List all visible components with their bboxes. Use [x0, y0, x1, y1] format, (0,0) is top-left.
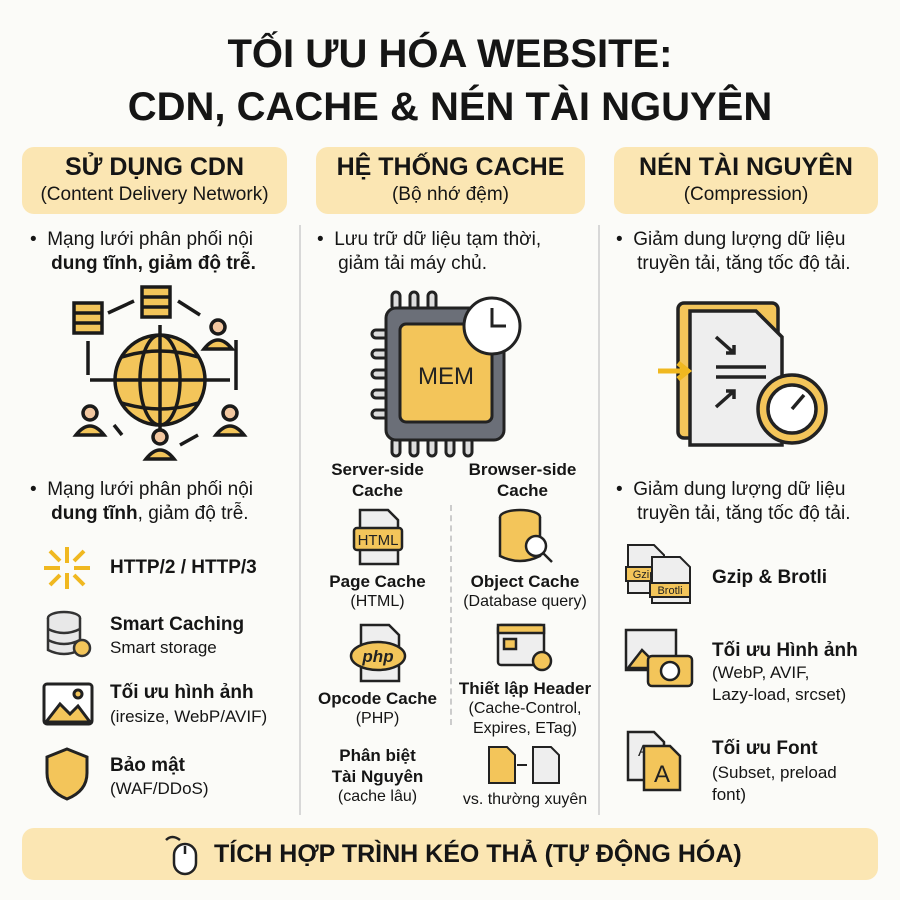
item: font: (Subset, preload — [712, 763, 837, 782]
item: distinguish: Tài Nguyên — [332, 767, 423, 786]
item: font — [626, 730, 837, 804]
panel: cache: Expires, ETag) — [473, 720, 577, 737]
bullet 2: • Giảm dung lượng dữ liệu — [616, 479, 845, 500]
header: cache — [316, 147, 585, 214]
icon: memory chip with clock: MEM — [418, 363, 474, 390]
item: gzip: Gzip — [633, 569, 655, 581]
item: HTTP: HTTP/2 / HTTP/3 — [110, 557, 257, 578]
item: Object Cache: Object Cache — [471, 572, 579, 591]
item: images: Tối ưu hình ảnh — [110, 682, 254, 703]
bullet 1: truyền tải, tăng tốc độ tải. — [637, 253, 850, 274]
item: header — [459, 624, 591, 737]
item: security: Bảo mật — [110, 755, 185, 776]
item: Opcode: (PHP) — [356, 710, 399, 727]
item: Object Cache — [463, 508, 587, 610]
item: gzip: Gzip & Brotli — [712, 567, 827, 588]
item: images — [42, 682, 267, 726]
bullet 2: • Mạng lưới phân phối nội — [30, 479, 253, 500]
header: compression: NÉN TÀI NGUYÊN — [639, 153, 853, 181]
header: cache: (Bộ nhớ đệm) — [392, 184, 509, 205]
panel: CDN — [30, 229, 267, 801]
item: security — [46, 747, 209, 801]
item: Object Cache: (Database query) — [463, 593, 587, 610]
item: header: Thiết lập Header — [459, 679, 591, 698]
item: distinguish — [332, 746, 423, 805]
icon: compressed document with gauge — [658, 301, 828, 447]
item: Opcode — [318, 624, 437, 727]
item: image opt: Lazy-load, srcset) — [712, 685, 846, 704]
footer bar: TÍCH HỢP TRÌNH KÉO THẢ (TỰ ĐỘNG HÓA) — [214, 840, 742, 868]
item: font: Tối ưu Font — [712, 738, 818, 759]
header: CDN — [22, 147, 287, 214]
item: image opt — [624, 628, 858, 704]
item: font: font) — [712, 785, 746, 804]
item: vs — [463, 746, 587, 808]
bullet 1: • Mạng lưới phân phối nội — [30, 229, 253, 250]
item: security: (WAF/DDoS) — [110, 779, 209, 798]
panel: cache: Cache — [497, 481, 548, 500]
header: cache: HỆ THỐNG CACHE — [337, 153, 564, 181]
bullet: • Lưu trữ dữ liệu tạm thời, — [317, 229, 541, 250]
header: compression — [614, 147, 878, 214]
bullet 1: dung tĩnh, giảm độ trễ. — [51, 253, 256, 274]
bullet 2: dung tĩnh, giảm độ trễ. — [51, 503, 249, 524]
item: Page Cache: HTML — [357, 532, 398, 549]
item: gzip: Brotli — [657, 585, 683, 597]
title: CDN, CACHE & NÉN TÀI NGUYÊN — [128, 85, 772, 129]
item: HTTP — [44, 547, 257, 589]
bullet 1 — [616, 229, 850, 274]
footer bar — [22, 828, 878, 880]
item: image opt: Tối ưu Hình ảnh — [712, 640, 858, 661]
item: font: A — [654, 761, 670, 788]
subheads: Server-side — [331, 460, 424, 479]
bullet 2 — [30, 479, 253, 524]
bullet 2 — [616, 479, 850, 524]
item: header: (Cache-Control, — [469, 700, 581, 717]
title — [128, 31, 772, 129]
header: compression: (Compression) — [684, 184, 808, 205]
subheads — [331, 460, 424, 500]
icon: memory chip with clock — [370, 290, 522, 458]
bullet 1: • Giảm dung lượng dữ liệu — [616, 229, 845, 250]
item: Opcode: Opcode Cache — [318, 689, 437, 708]
item: Smart Caching — [46, 610, 244, 658]
item: Page Cache: Page Cache — [329, 572, 426, 591]
bullet — [317, 229, 541, 274]
title: TỐI ƯU HÓA WEBSITE: — [227, 32, 673, 76]
item: vs: vs. thường xuyên — [463, 791, 587, 808]
item: Smart Caching: Smart Caching — [110, 614, 244, 635]
icon: mouse — [165, 836, 198, 876]
panel: cache — [317, 229, 591, 808]
item: images: (iresize, WebP/AVIF) — [110, 707, 267, 726]
panel: cache: Browser-side — [469, 460, 576, 479]
item: Opcode: php — [361, 647, 393, 666]
item: distinguish: (cache lâu) — [338, 788, 417, 805]
icon: globe network — [72, 285, 248, 461]
item: gzip — [625, 544, 827, 604]
header: CDN: (Content Delivery Network) — [40, 184, 269, 205]
item: distinguish: Phân biệt — [339, 746, 416, 765]
bullet 2: truyền tải, tăng tốc độ tải. — [637, 503, 850, 524]
bullet: giảm tải máy chủ. — [338, 253, 487, 274]
item: image opt: (WebP, AVIF, — [712, 663, 809, 682]
item: font: A — [638, 743, 649, 760]
header: CDN: SỬ DỤNG CDN — [65, 153, 244, 181]
bullet 1 — [30, 229, 256, 274]
item: Page Cache — [329, 508, 426, 610]
item: Smart Caching: Smart storage — [110, 638, 217, 657]
subheads: Cache — [352, 481, 403, 500]
panel: compression — [616, 229, 858, 804]
item: Page Cache: (HTML) — [350, 593, 405, 610]
